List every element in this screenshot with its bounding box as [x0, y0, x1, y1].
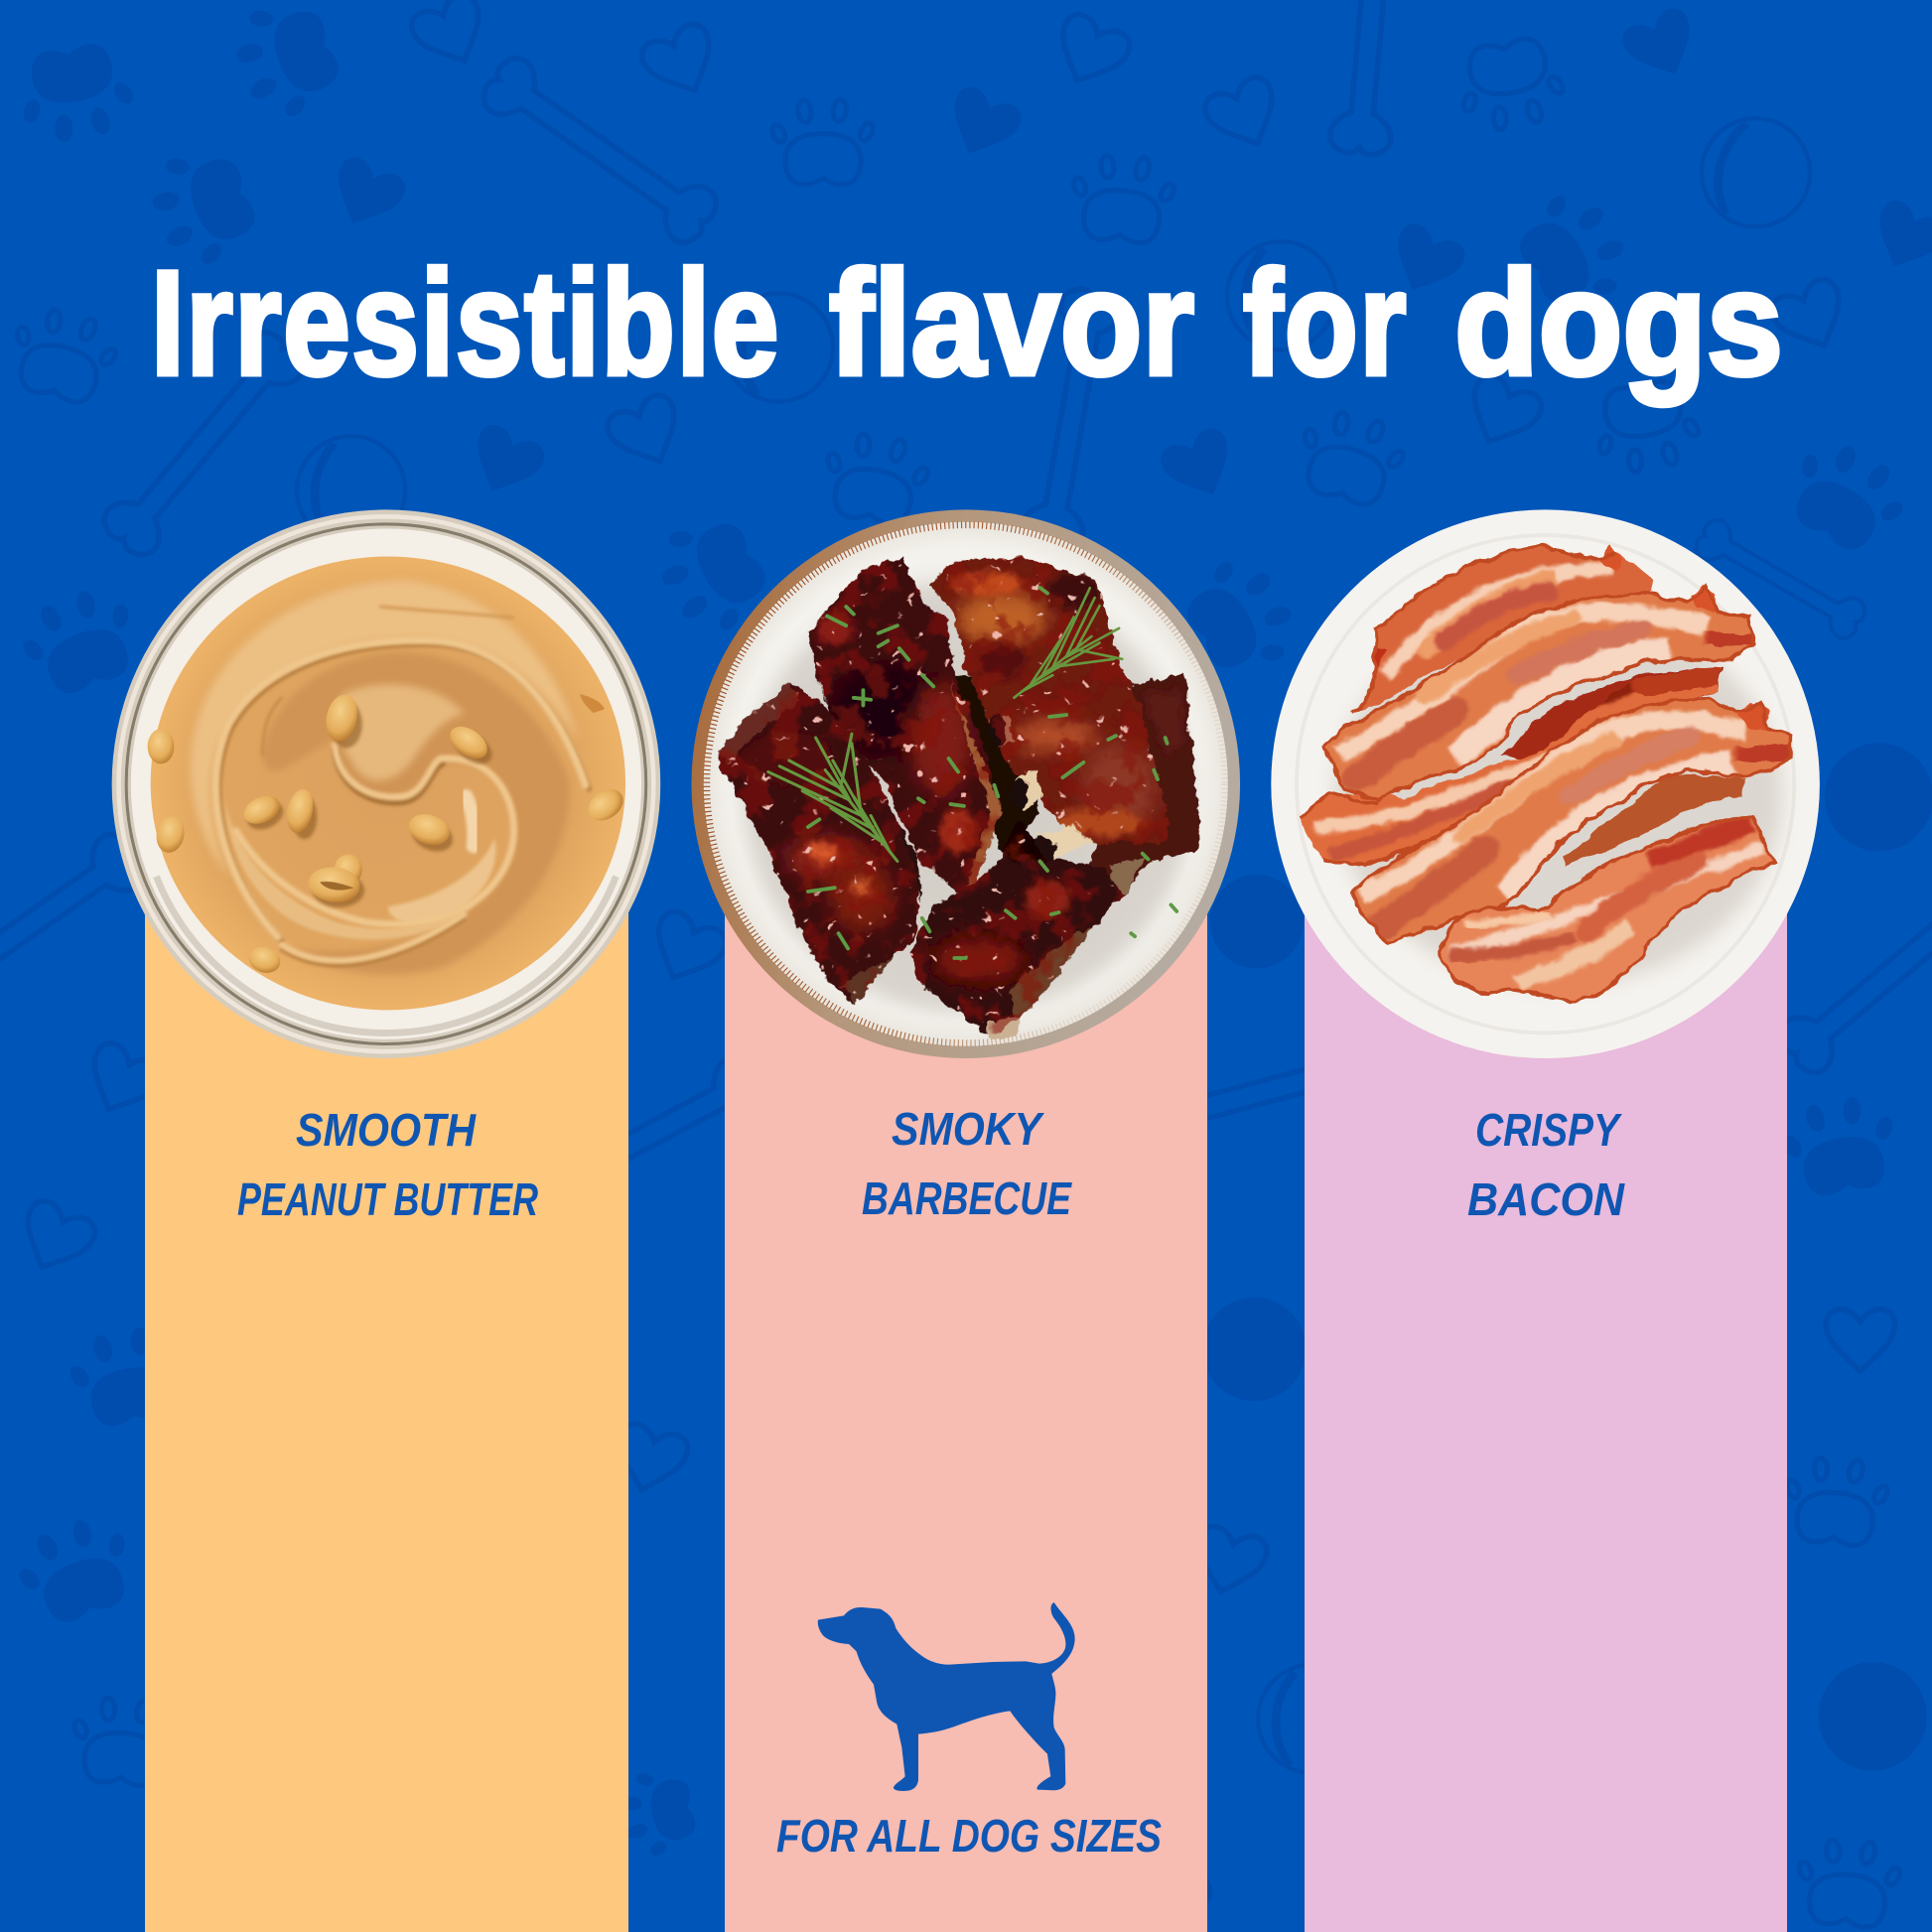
caption: for all dog sizes: FOR ALL DOG SIZES	[776, 1810, 1162, 1862]
rib bottom	[906, 815, 1131, 1039]
label: smoky barbecue: SMOKY	[892, 1103, 1045, 1155]
sauce texture and gloss	[718, 555, 1170, 1035]
rib bones	[991, 713, 1014, 746]
rib centre	[804, 553, 1006, 896]
middle front bacon strip	[1346, 694, 1798, 948]
crisp bacon edges	[1299, 546, 1790, 1002]
label: crispy bacon: CRISPY	[1475, 1104, 1623, 1156]
label: smooth peanut butter: SMOOTH	[296, 1104, 477, 1156]
under strip shadow piece	[1563, 773, 1745, 867]
label: smooth peanut butter: PEANUT BUTTER	[237, 1173, 538, 1225]
label: crispy bacon: BACON	[1467, 1173, 1625, 1225]
label: smooth peanut butter	[237, 1104, 538, 1225]
rib left	[717, 682, 920, 1005]
panel: barbecue column	[725, 894, 1207, 1932]
title: flavor	[829, 239, 1194, 406]
panel: bacon column	[1305, 894, 1787, 1932]
title: Irresistible	[151, 239, 780, 406]
title: for	[1243, 239, 1408, 406]
panel: peanut butter column	[145, 894, 628, 1932]
label: smoky barbecue	[862, 1103, 1072, 1224]
front bacon strip	[1438, 812, 1779, 1006]
label: crispy bacon	[1467, 1104, 1625, 1225]
rib right top	[926, 553, 1173, 846]
far right rib	[1085, 673, 1199, 896]
dark gap under ribs	[954, 675, 1039, 858]
image: plate of crispy bacon	[1271, 509, 1820, 1058]
upper front bacon strip	[1324, 594, 1752, 798]
middle back bacon strip	[1502, 667, 1723, 762]
title	[151, 239, 1783, 406]
image: plate of barbecue ribs	[691, 509, 1240, 1066]
icon: dog silhouette	[818, 1602, 1075, 1791]
title: dogs	[1454, 239, 1783, 406]
peanuts	[148, 692, 629, 977]
chopped herbs	[808, 588, 1176, 958]
rosemary sprigs	[768, 734, 897, 861]
back bacon strip	[1360, 546, 1654, 711]
label: smoky barbecue: BARBECUE	[862, 1173, 1072, 1224]
image: bowl of peanut butter	[112, 509, 660, 1058]
swirl ridges	[215, 607, 589, 965]
